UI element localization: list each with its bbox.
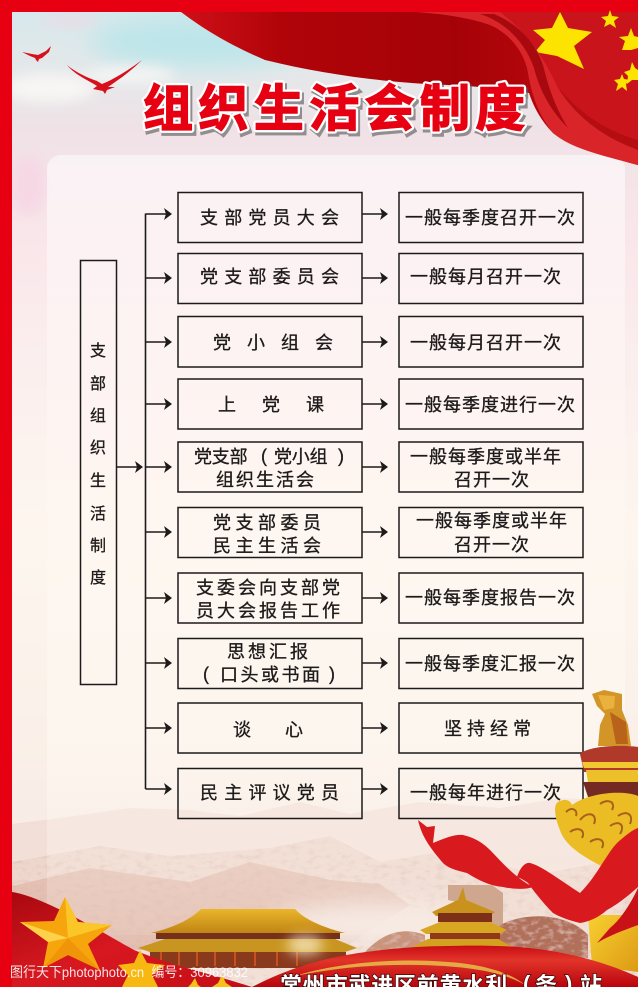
left column labels: 口头或书面 bbox=[220, 665, 322, 685]
right column labels: 一般每月召开一次 bbox=[410, 333, 562, 353]
right column labels: 一般每季度汇报一次 bbox=[405, 654, 576, 674]
left column labels: 支委会向支部党 bbox=[196, 578, 343, 598]
root box: 支部组织生活制度: 生 bbox=[90, 472, 106, 490]
row boxes bbox=[178, 192, 583, 818]
right column labels bbox=[405, 208, 576, 803]
root box: 支部组织生活制度: 度 bbox=[90, 569, 106, 587]
bottom left red wave bbox=[12, 892, 252, 987]
watermark: 图行天下photophoto.cn 编号：30963832 bbox=[10, 964, 248, 980]
left column labels: ) bbox=[338, 446, 344, 466]
left column labels: 民主生活会 bbox=[213, 536, 326, 556]
hua biao column with lion bbox=[555, 690, 638, 972]
left column labels: ) bbox=[329, 664, 335, 684]
root box: 支部组织生活制度: 织 bbox=[90, 439, 106, 457]
left column labels: 谈心 bbox=[233, 720, 337, 740]
chart connectors and arrows bbox=[116, 208, 388, 795]
icon: gold stars bbox=[20, 897, 232, 987]
red flag banner bbox=[181, 10, 638, 165]
white content panel bbox=[47, 155, 625, 935]
left column labels: 党支部委员 bbox=[213, 513, 326, 533]
right column labels: 一般每月召开一次 bbox=[410, 267, 562, 287]
left column labels: 支部党员大会 bbox=[200, 208, 345, 228]
left column labels: ( bbox=[203, 664, 209, 684]
left column labels: 员大会报告工作 bbox=[196, 601, 343, 621]
red ribbon bbox=[418, 820, 638, 943]
right column labels: 一般每年进行一次 bbox=[410, 783, 562, 803]
text: 组织生活会制度 bbox=[143, 81, 531, 137]
bottom right red band bbox=[252, 946, 638, 987]
icon: yellow flag stars bbox=[533, 10, 638, 91]
root box: 支部组织生活制度: 组 bbox=[90, 407, 106, 425]
left column labels: ( bbox=[261, 446, 267, 466]
left column labels bbox=[194, 208, 350, 803]
right column labels: 一般每季度报告一次 bbox=[405, 588, 576, 608]
right column labels: 坚持经常 bbox=[444, 719, 536, 739]
left column labels: 上党课 bbox=[218, 395, 350, 415]
root box: 支部组织生活制度: 制 bbox=[90, 537, 106, 555]
palace hall bbox=[138, 909, 357, 968]
left column labels: 组织生活会 bbox=[216, 470, 316, 490]
right column labels: 一般每季度进行一次 bbox=[405, 395, 576, 415]
icon: red birds bbox=[22, 46, 142, 94]
left column labels: 思想汇报 bbox=[227, 642, 311, 662]
right column labels: 召开一次 bbox=[454, 470, 530, 490]
right column labels: 一般每季度或半年 bbox=[416, 511, 568, 531]
footer organisation name bbox=[280, 971, 602, 987]
root box: 支部组织生活制度 bbox=[80, 260, 116, 684]
temple of heaven and wall bbox=[355, 885, 588, 975]
title: 组织生活会制度 bbox=[145, 84, 533, 140]
left column labels: 党小组会 bbox=[213, 333, 349, 353]
right column labels: 一般每季度或半年 bbox=[410, 447, 562, 467]
right column labels: 一般每季度召开一次 bbox=[405, 208, 576, 228]
left column labels: 党支部委员会 bbox=[200, 267, 345, 287]
root box: 支部组织生活制度: 支 bbox=[90, 342, 106, 360]
root box: 支部组织生活制度: 部 bbox=[90, 375, 106, 393]
right column labels: 召开一次 bbox=[454, 535, 530, 555]
left column labels: 党支部 bbox=[194, 447, 248, 467]
left column labels: 民主评议党员 bbox=[200, 783, 345, 803]
left column labels: 党小组 bbox=[274, 447, 328, 467]
root box: 支部组织生活制度: 活 bbox=[90, 505, 106, 523]
text: 组织生活会制度 bbox=[143, 81, 531, 137]
